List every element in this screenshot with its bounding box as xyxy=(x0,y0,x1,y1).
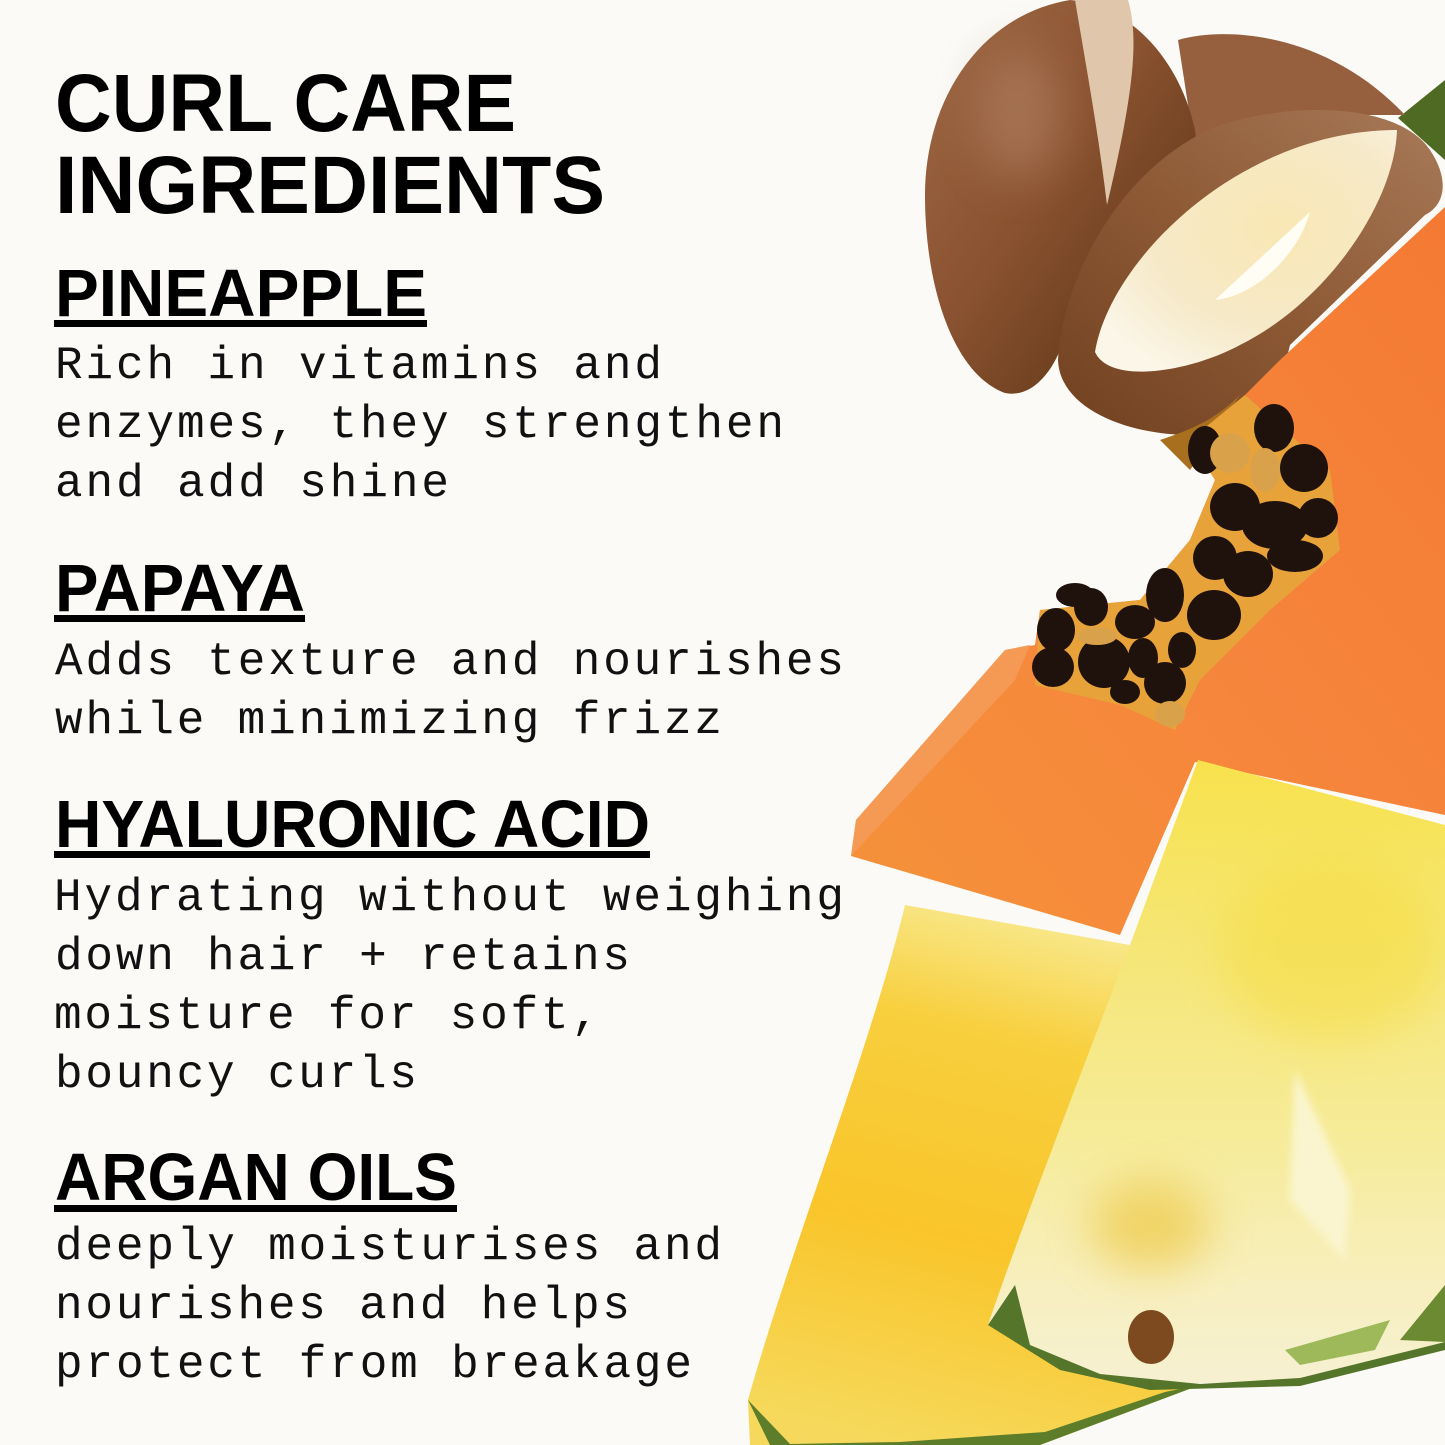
text: argan oils description: protect from breakage xyxy=(55,1339,692,1391)
heading: argan oils: ARGAN OILS xyxy=(55,1140,457,1215)
argan kernel xyxy=(1095,130,1397,372)
oil drip xyxy=(1160,395,1240,470)
title: INGREDIENTS xyxy=(55,140,605,231)
papaya flesh xyxy=(851,207,1445,935)
pineapple eye xyxy=(1128,1310,1174,1364)
seed cavity xyxy=(1035,395,1340,730)
left wedge rind xyxy=(748,1385,1200,1445)
papaya skin edge xyxy=(851,645,1030,856)
rind corner xyxy=(1400,1285,1445,1342)
text: papaya description: Adds texture and nourishes xyxy=(55,636,844,688)
left pineapple wedge xyxy=(748,905,1200,1445)
text: papaya description: while minimizing frizz xyxy=(55,695,722,747)
heading: pineapple: PINEAPPLE xyxy=(55,256,427,331)
title: CURL CARE xyxy=(55,58,516,149)
pineapple pale fibre xyxy=(1290,1070,1350,1260)
text: pineapple description: and add shine xyxy=(55,458,449,510)
title xyxy=(55,58,605,231)
illustration: pineapple wedges xyxy=(748,760,1445,1445)
text: hyaluronic acid description: moisture for soft, xyxy=(54,990,599,1042)
back nut xyxy=(1178,34,1405,150)
right wedge rind xyxy=(988,1285,1445,1390)
open nut shell xyxy=(1058,110,1443,435)
nut crack xyxy=(1075,0,1133,205)
green leaf xyxy=(1398,80,1445,160)
text: argan oils description xyxy=(55,1221,722,1391)
whole nut xyxy=(925,0,1196,394)
text: papaya description xyxy=(55,636,844,747)
text: hyaluronic acid description: bouncy curls xyxy=(55,1049,417,1101)
pineapple yellow glow xyxy=(1220,860,1440,1040)
text: hyaluronic acid description: down hair + retains xyxy=(55,931,630,983)
heading: hyaluronic acid: HYALURONIC ACID xyxy=(55,787,650,862)
text: argan oils description: nourishes and helps xyxy=(55,1280,630,1332)
ingredient: pineapple xyxy=(54,256,784,510)
seeds xyxy=(1032,404,1338,704)
text: pineapple description: Rich in vitamins and xyxy=(55,340,662,392)
text: pineapple description: enzymes, they strengthen xyxy=(55,399,784,451)
green patch xyxy=(1285,1320,1390,1365)
illustration: argan nuts xyxy=(925,0,1445,470)
text: hyaluronic acid description: Hydrating without weighing xyxy=(54,872,844,924)
text: pineapple description xyxy=(55,340,784,510)
ingredient: hyaluronic acid xyxy=(54,787,844,1101)
illustration: papaya xyxy=(851,207,1445,935)
heading: papaya: PAPAYA xyxy=(55,551,305,626)
text: argan oils description: deeply moisturises and xyxy=(55,1221,722,1273)
nut highlight xyxy=(978,50,1062,180)
ingredient: papaya xyxy=(54,551,844,747)
right pineapple wedge xyxy=(988,760,1445,1385)
ingredient: argan oils xyxy=(54,1140,722,1391)
pineapple golden patch xyxy=(1090,1180,1210,1270)
text: hyaluronic acid description xyxy=(54,872,844,1101)
oil highlight xyxy=(1215,212,1310,300)
seed pulp xyxy=(1077,433,1280,727)
